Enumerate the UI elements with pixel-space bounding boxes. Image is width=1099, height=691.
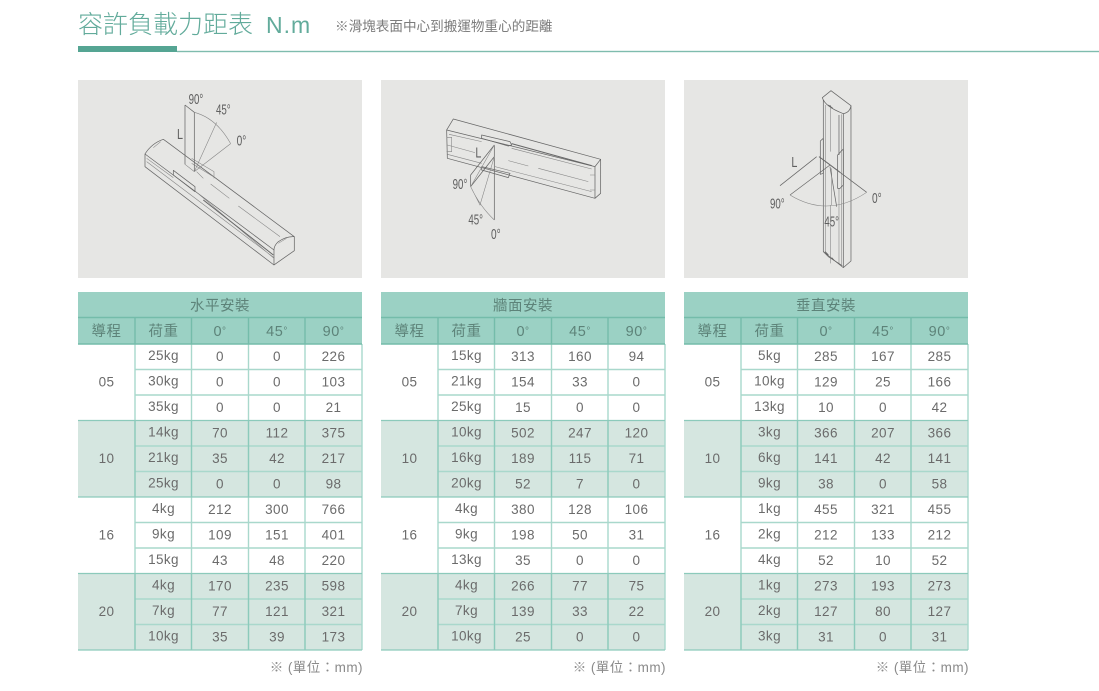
- table body: 21kg: [451, 374, 482, 388]
- table body: 20kg: [451, 476, 482, 490]
- table body: 13kg: [754, 399, 785, 414]
- table body: 94: [629, 349, 644, 364]
- table body: 0: [216, 374, 224, 390]
- table body: 4kg: [455, 578, 478, 592]
- table title: 垂直安裝: [796, 298, 856, 314]
- table body: 0: [633, 630, 640, 644]
- table body: 35: [212, 451, 228, 466]
- table body: 3kg: [758, 424, 781, 440]
- table body: 0: [273, 400, 281, 415]
- table body: 0: [216, 400, 224, 415]
- table body: 198: [511, 528, 535, 542]
- table body: 25kg: [148, 348, 179, 363]
- table body: 35kg: [148, 399, 179, 414]
- table body: 4kg: [152, 501, 175, 516]
- table body: 321: [871, 502, 895, 517]
- subtitle note: ※滑塊表面中心到搬運物重心的距離: [335, 18, 553, 34]
- table body: 16: [99, 528, 114, 542]
- table body: 207: [871, 426, 895, 440]
- icon: wall actuator: 90°: [453, 177, 467, 193]
- table body: 31: [818, 630, 834, 644]
- column headers: 0°: [516, 324, 530, 340]
- icon: horizontal actuator: 90°: [189, 92, 203, 108]
- table body: 35: [515, 553, 531, 568]
- table body: 10kg: [754, 374, 785, 388]
- table body: 70: [212, 426, 228, 440]
- panel: horizontal mounting diagram: [78, 80, 362, 278]
- icon: horizontal actuator: 45°: [216, 102, 231, 118]
- column headers: 導程: [698, 323, 728, 340]
- table body: 20: [705, 604, 720, 619]
- title: 容許負載力距表: [78, 11, 253, 39]
- table body: 13kg: [451, 552, 482, 567]
- panel: wall mounting diagram: [381, 80, 665, 278]
- table body: 50: [572, 528, 588, 542]
- table body: 170: [208, 578, 232, 594]
- table body: 42: [875, 451, 891, 466]
- table body: 58: [932, 476, 947, 492]
- table body: 9kg: [758, 476, 781, 490]
- table body: 193: [871, 578, 895, 594]
- column headers: 0°: [213, 324, 227, 340]
- column headers: 45°: [569, 324, 591, 340]
- icon: vertical actuator: [770, 91, 882, 268]
- table body: 220: [322, 553, 345, 568]
- table body: 0: [633, 400, 640, 415]
- table body: 71: [629, 451, 644, 466]
- table body: 42: [269, 451, 285, 466]
- table body: 16: [402, 528, 417, 542]
- table body: 375: [322, 426, 345, 440]
- table body: 273: [928, 578, 951, 594]
- table body: 31: [629, 528, 644, 542]
- table body: 166: [928, 374, 951, 390]
- table body: 0: [879, 400, 887, 415]
- table body: 21: [326, 400, 341, 415]
- table body: 52: [515, 476, 531, 492]
- table body: 4kg: [152, 578, 175, 592]
- column headers: 荷重: [148, 323, 178, 340]
- icon: vertical actuator: L: [791, 155, 797, 171]
- table body: 0: [273, 349, 281, 364]
- table body: 0: [216, 349, 224, 364]
- table body: 31: [932, 630, 947, 644]
- column headers: 導程: [394, 323, 424, 340]
- table body: 129: [814, 374, 838, 390]
- table body: 52: [818, 553, 834, 568]
- table body: 9kg: [152, 526, 175, 542]
- table body: 52: [932, 553, 947, 568]
- icon: horizontal actuator: 0°: [237, 134, 246, 150]
- table body: 77: [572, 578, 588, 594]
- table body: 0: [633, 553, 640, 568]
- table body: 0: [633, 476, 640, 492]
- table body: 109: [208, 528, 232, 542]
- table body: 4kg: [758, 552, 781, 567]
- column headers: 90°: [626, 324, 647, 340]
- table title: 水平安裝: [190, 298, 250, 314]
- table body: 10: [402, 451, 417, 466]
- table body: 0: [216, 476, 224, 492]
- table body: 39: [269, 630, 285, 644]
- table body: 154: [511, 374, 535, 390]
- table body: 3kg: [758, 628, 781, 644]
- table body: 10: [705, 451, 720, 466]
- table body: 77: [212, 604, 228, 619]
- heading rule: [78, 46, 1099, 52]
- table body: 48: [269, 553, 285, 568]
- column headers: 0°: [819, 324, 833, 340]
- icon: wall actuator: 45°: [468, 213, 483, 229]
- table body: 121: [265, 604, 289, 619]
- table body: 15kg: [148, 552, 179, 567]
- icon: horizontal actuator: [145, 92, 294, 265]
- table body: 16kg: [451, 450, 482, 465]
- table body: 235: [265, 578, 289, 594]
- table body: 9kg: [455, 526, 478, 542]
- table body: 151: [265, 528, 289, 542]
- table body: 7kg: [152, 603, 175, 618]
- table body: 160: [568, 349, 592, 364]
- table body: 33: [572, 374, 588, 390]
- table body: 25kg: [451, 399, 482, 414]
- table body: [705, 348, 951, 644]
- table body: 212: [814, 528, 838, 542]
- table body: 212: [928, 528, 951, 542]
- table body: 212: [208, 502, 232, 517]
- table body: 05: [705, 374, 720, 390]
- table body: [402, 348, 648, 644]
- table body: 42: [932, 400, 947, 415]
- table body: 0: [576, 400, 584, 415]
- icon: vertical actuator: 0°: [872, 191, 882, 207]
- table body: 10: [818, 400, 834, 415]
- table body: 10: [875, 553, 891, 568]
- table body: 10kg: [451, 628, 482, 644]
- table body: [99, 348, 345, 644]
- table body: 128: [568, 502, 592, 517]
- table body: 285: [928, 349, 951, 364]
- column headers: 45°: [266, 324, 288, 340]
- table body: 98: [326, 476, 341, 492]
- table body: 141: [814, 451, 838, 466]
- table body: 321: [322, 604, 345, 619]
- icon: wall actuator: 0°: [491, 227, 501, 243]
- table body: 366: [928, 426, 951, 440]
- column headers: 45°: [872, 324, 894, 340]
- table body: 300: [265, 502, 289, 517]
- icon: horizontal actuator: L: [177, 127, 183, 143]
- table body: 1kg: [758, 578, 781, 592]
- unit note: ※ (單位：mm): [573, 660, 666, 675]
- icon: vertical actuator: 90°: [770, 196, 785, 212]
- table body: 5kg: [758, 348, 781, 363]
- table body: 0: [633, 374, 640, 390]
- table body: 6kg: [758, 450, 781, 465]
- table body: 2kg: [758, 526, 781, 542]
- table body: 75: [629, 578, 644, 594]
- table body: 217: [322, 451, 345, 466]
- icon: wall actuator: [447, 119, 601, 243]
- table body: 10: [99, 451, 114, 466]
- panel: vertical mounting diagram: [684, 80, 968, 278]
- table body: 7: [576, 476, 584, 492]
- table: horizontal mounting: [78, 292, 363, 675]
- table body: 0: [273, 476, 281, 492]
- table body: 33: [572, 604, 588, 619]
- table body: 16: [705, 528, 720, 542]
- table body: 20: [99, 604, 114, 619]
- table body: 14kg: [148, 424, 179, 440]
- table title: 牆面安裝: [493, 298, 553, 314]
- table body: 21kg: [148, 450, 179, 465]
- table body: 25: [515, 630, 531, 644]
- table: vertical mounting: [684, 292, 969, 675]
- table body: 15: [515, 400, 531, 415]
- table body: 20: [402, 604, 417, 619]
- table body: 10kg: [451, 424, 482, 440]
- table body: 139: [511, 604, 535, 619]
- table body: 0: [273, 374, 281, 390]
- table body: 0: [879, 630, 887, 644]
- table body: 313: [511, 349, 535, 364]
- table body: 10kg: [148, 628, 179, 644]
- table body: 127: [814, 604, 838, 619]
- table body: 380: [511, 502, 535, 517]
- table body: 05: [99, 374, 114, 390]
- table body: 266: [511, 578, 535, 594]
- column headers: 荷重: [452, 323, 482, 340]
- table body: 285: [814, 349, 838, 364]
- unit note: ※ (單位：mm): [876, 660, 969, 675]
- table body: 247: [568, 426, 592, 440]
- table: wall mounting: [381, 292, 666, 675]
- table body: 273: [814, 578, 838, 594]
- icon: wall actuator: L: [475, 146, 481, 162]
- table body: 25kg: [148, 476, 179, 490]
- table body: 189: [511, 451, 535, 466]
- table body: 15kg: [451, 348, 482, 363]
- table body: 115: [569, 451, 591, 466]
- table body: 22: [629, 604, 644, 619]
- table body: 2kg: [758, 603, 781, 618]
- table body: 43: [212, 553, 228, 568]
- table body: 112: [266, 426, 288, 440]
- table body: 366: [814, 426, 838, 440]
- table body: 133: [871, 528, 895, 542]
- column headers: 90°: [323, 324, 344, 340]
- table body: 103: [322, 374, 345, 390]
- table body: 141: [928, 451, 951, 466]
- icon: vertical actuator: 45°: [824, 215, 839, 231]
- table body: 4kg: [455, 501, 478, 516]
- table body: 167: [871, 349, 895, 364]
- table body: 455: [814, 502, 838, 517]
- column headers: 90°: [929, 324, 950, 340]
- table body: 502: [511, 426, 535, 440]
- table body: 0: [879, 476, 887, 492]
- table body: 38: [818, 476, 834, 492]
- table body: 80: [875, 604, 891, 619]
- table body: 0: [576, 630, 584, 644]
- table body: 05: [402, 374, 417, 390]
- title: N.m: [266, 12, 311, 38]
- table body: 455: [928, 502, 951, 517]
- column headers: 導程: [92, 323, 122, 340]
- unit note: ※ (單位：mm): [270, 660, 363, 675]
- table body: 30kg: [148, 374, 179, 388]
- table body: 120: [625, 426, 648, 440]
- table body: 598: [322, 578, 345, 594]
- table body: 106: [625, 502, 648, 517]
- table body: 401: [322, 528, 345, 542]
- table body: 226: [322, 349, 345, 364]
- table body: 0: [576, 553, 584, 568]
- table body: 7kg: [455, 603, 478, 618]
- table body: 173: [322, 630, 345, 644]
- table body: 766: [322, 502, 345, 517]
- table body: 1kg: [758, 501, 781, 516]
- table body: 127: [928, 604, 951, 619]
- table body: 35: [212, 630, 228, 644]
- column headers: 荷重: [754, 323, 784, 340]
- table body: 25: [875, 374, 891, 390]
